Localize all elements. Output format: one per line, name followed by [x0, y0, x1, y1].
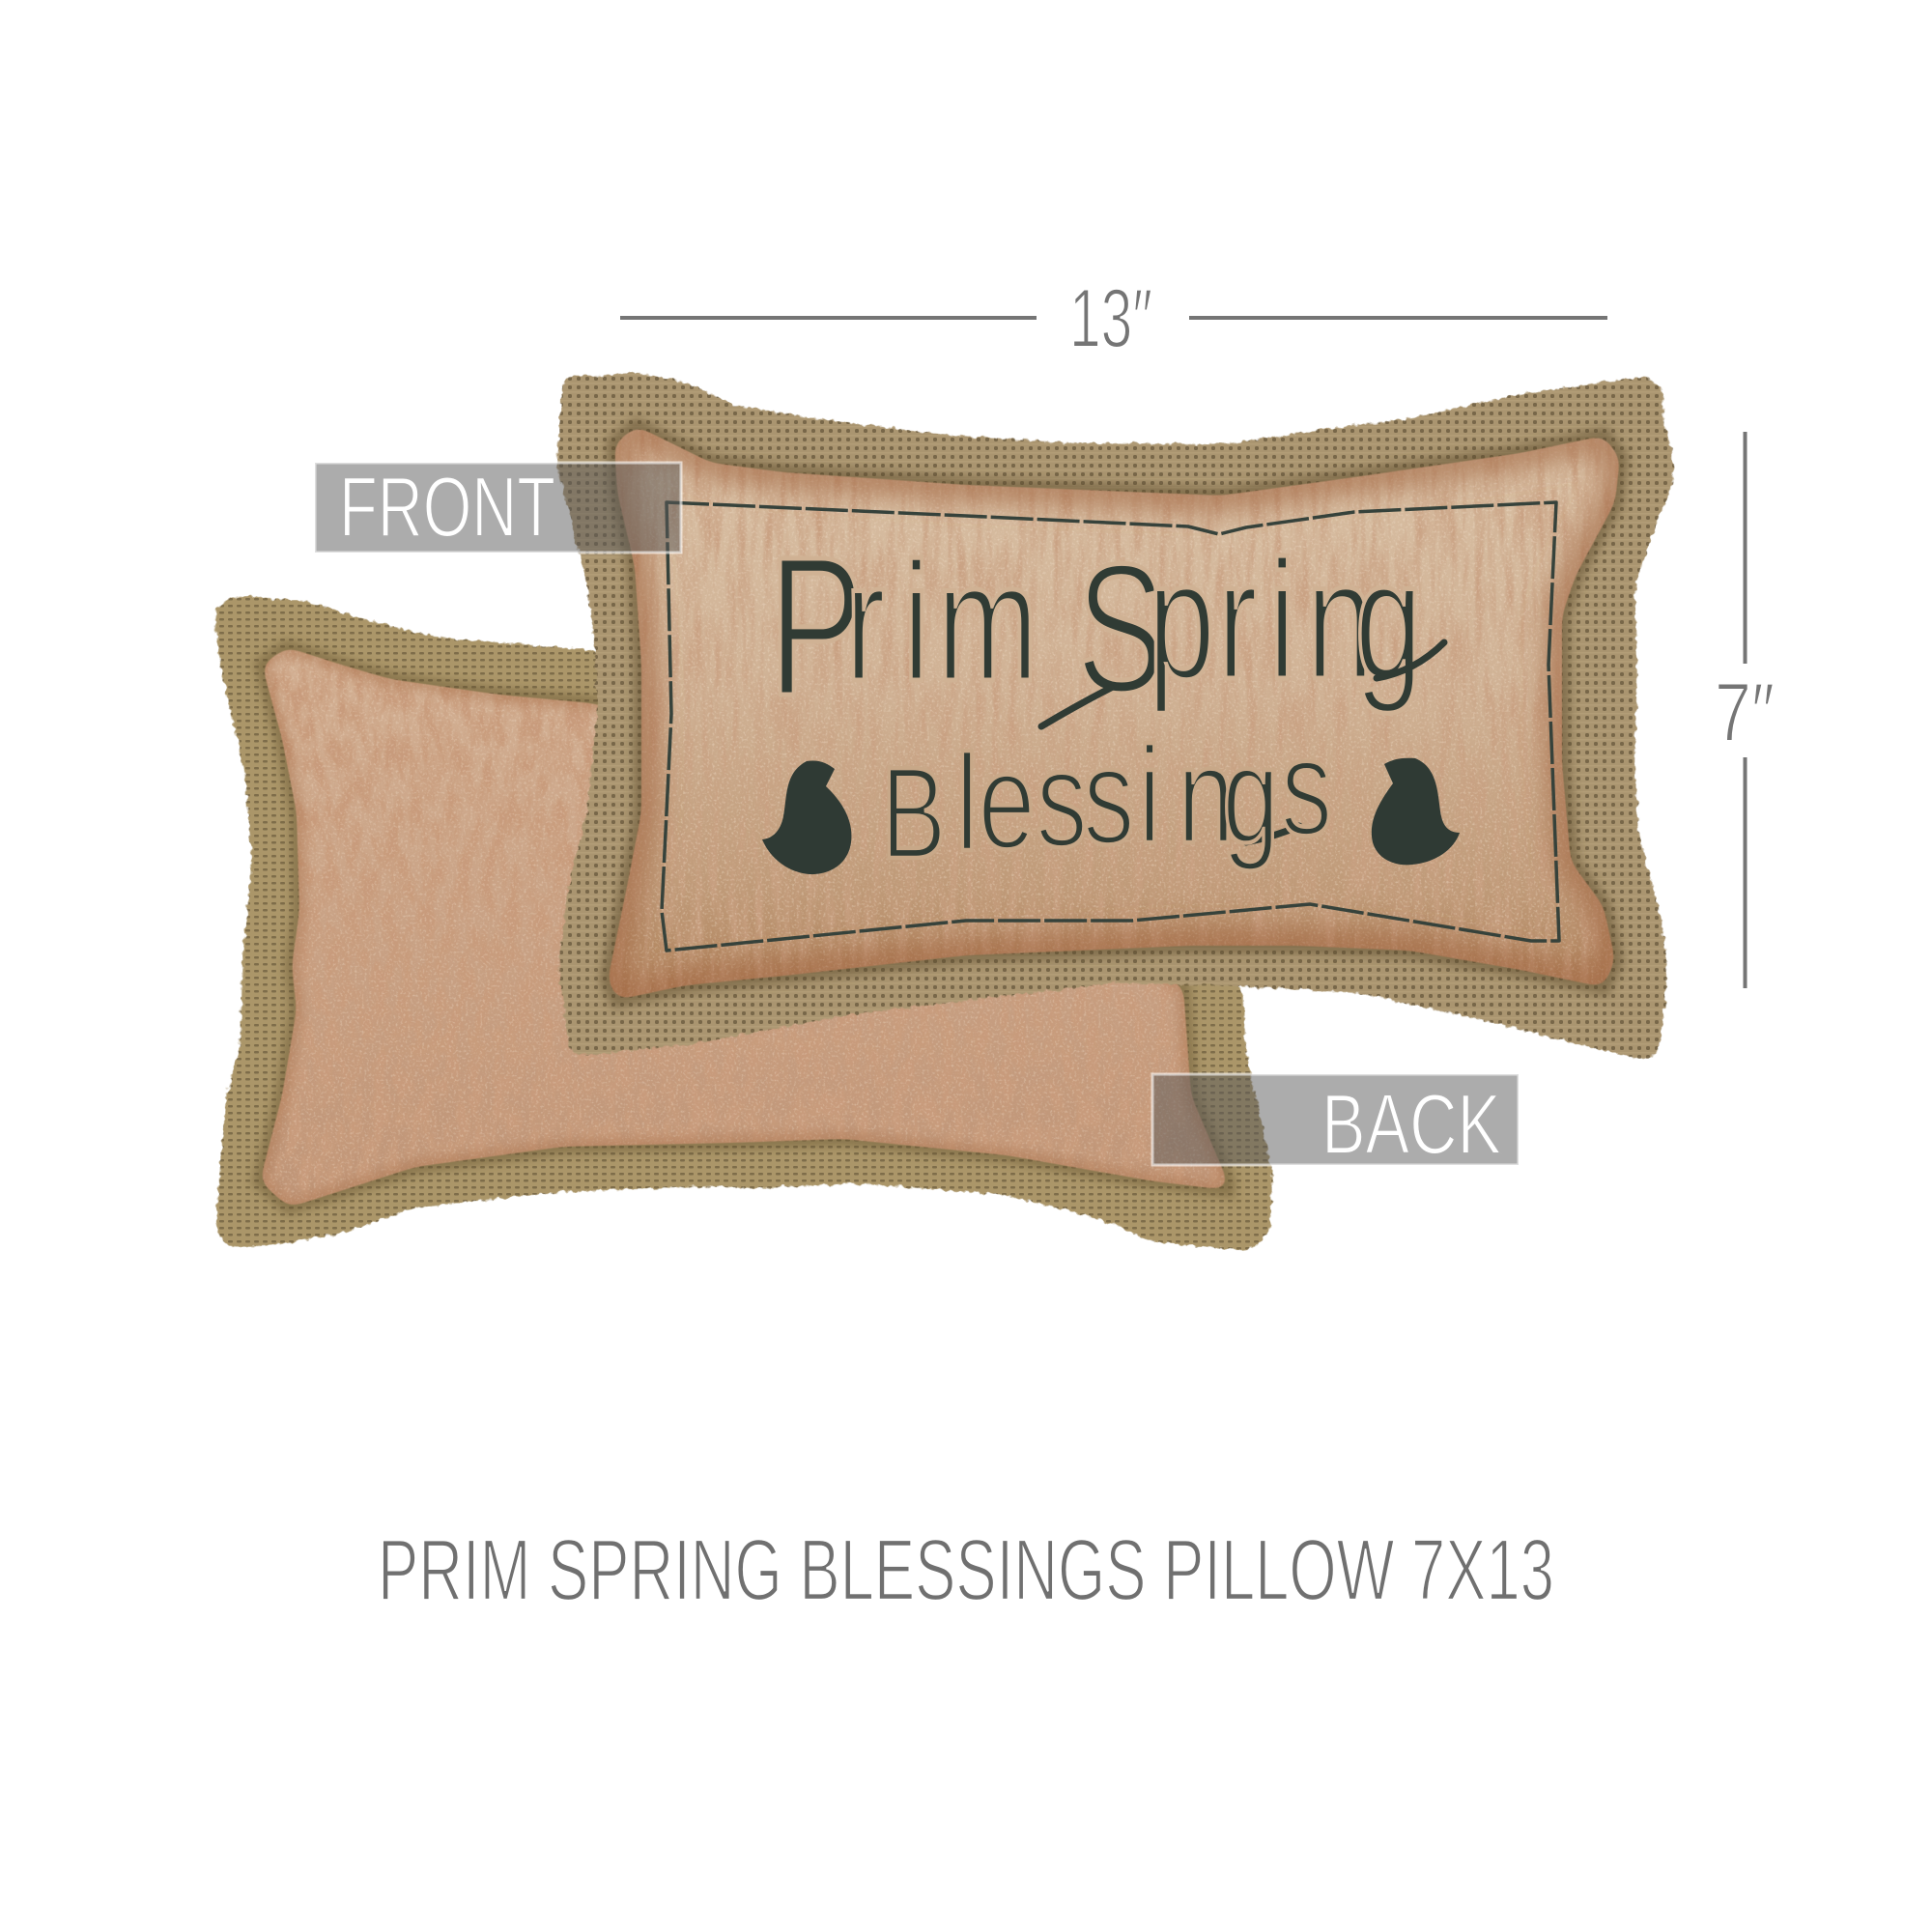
- back pillow burlap border: [193, 580, 1294, 1265]
- pillow lettering: Blessings: B: [881, 741, 947, 886]
- icon: right bird: [1372, 758, 1460, 865]
- front pillow chenille panel: [599, 425, 1633, 1005]
- front pillow burlap border: [541, 357, 1690, 1072]
- dimension: height 7 inches: [1715, 432, 1775, 988]
- pillow lettering: Prim Spring: P: [769, 515, 864, 737]
- stitched border on pillow: [662, 502, 1559, 951]
- pillow lettering: Prim Spring: S: [1077, 526, 1165, 731]
- label: FRONT: FRONT: [339, 459, 555, 554]
- icon: left bird: [762, 760, 851, 874]
- label: BACK: [1152, 1074, 1519, 1172]
- label: BACK: BACK: [1321, 1076, 1501, 1172]
- front pillow: [541, 357, 1690, 1072]
- pillow lettering: Prim Spring: [769, 515, 1423, 737]
- dimension: width 13 inches: [620, 272, 1607, 365]
- dimension: width 13 inches: 13″: [1069, 272, 1152, 365]
- pillow lettering: Prim Spring: rim: [845, 528, 1038, 717]
- pillow lettering: Blessings: lessings: [955, 710, 1332, 880]
- dimension: height 7 inches: 7″: [1715, 667, 1775, 759]
- S tail and g crossbar flourishes: [1041, 642, 1444, 842]
- pillow lettering: Prim Spring: pring: [1148, 526, 1423, 715]
- back pillow chenille panel: [242, 638, 1246, 1208]
- back pillow: [193, 580, 1294, 1265]
